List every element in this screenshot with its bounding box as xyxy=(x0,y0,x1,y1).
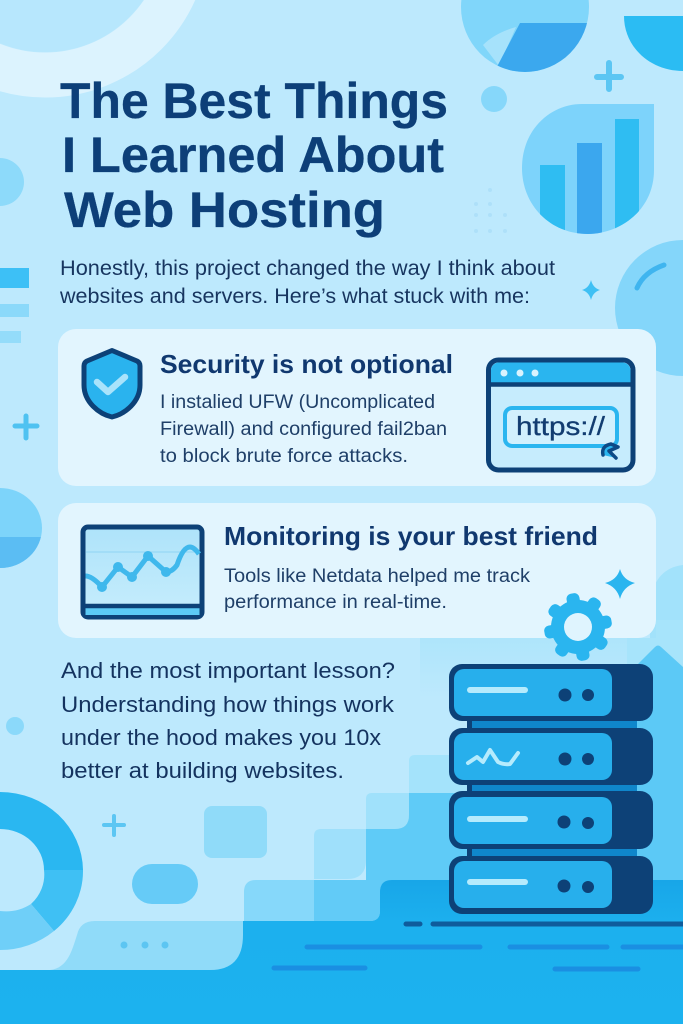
heading: monitoring: Monitoring is your best friend xyxy=(224,521,598,551)
server stack xyxy=(449,664,653,914)
donut chart xyxy=(0,792,83,950)
ground xyxy=(0,880,683,1024)
plus icon top xyxy=(597,63,621,89)
dot left xyxy=(6,717,24,735)
left stripes xyxy=(0,268,29,343)
intro text: websites and servers. Here’s what stuck with me: xyxy=(59,285,530,308)
heading: security: Security is not optional xyxy=(160,349,453,379)
closing text: under the hood makes you 10x xyxy=(61,725,381,750)
left circle xyxy=(0,158,24,206)
dotted grid xyxy=(474,188,507,233)
background steps xyxy=(244,620,683,921)
icon: shield xyxy=(84,350,140,417)
server unit 3 xyxy=(449,791,653,849)
icon: monitor chart xyxy=(83,527,202,617)
title: Web Hosting xyxy=(64,182,385,238)
quarter circle top right xyxy=(624,16,683,71)
plus icon lower xyxy=(104,816,124,835)
pie shape top right xyxy=(461,0,589,72)
left half circle xyxy=(0,488,42,569)
rounded square xyxy=(204,806,267,858)
blob right of cards xyxy=(650,565,683,645)
title: The Best Things xyxy=(60,73,448,129)
body: security: Firewall) and configured fail2ban xyxy=(160,419,447,440)
server unit 2 xyxy=(449,728,653,785)
closing text: better at building websites. xyxy=(61,758,344,783)
title: I Learned About xyxy=(62,127,444,183)
sparkle near gear xyxy=(605,569,635,599)
plus icon left xyxy=(15,416,37,438)
ground lines xyxy=(274,924,683,969)
panel: monitoring xyxy=(58,503,656,638)
sparkle xyxy=(582,280,600,300)
pill xyxy=(132,864,198,904)
title xyxy=(60,73,448,238)
panel: security xyxy=(58,329,656,486)
intro text: Honestly, this project changed the way I think about xyxy=(60,257,555,280)
body: monitoring: Tools like Netdata helped me track xyxy=(224,566,531,587)
decorative arc top left xyxy=(0,0,187,75)
circle right xyxy=(615,240,683,376)
body: monitoring xyxy=(224,566,531,613)
closing text: And the most important lesson? xyxy=(61,658,395,683)
icon: browser https: https:// xyxy=(516,411,606,441)
bar chart badge xyxy=(522,104,654,235)
body: security: I instalied UFW (Uncomplicated xyxy=(160,392,435,413)
closing text xyxy=(61,658,395,783)
server unit 1 xyxy=(449,664,653,721)
body: security xyxy=(160,392,447,467)
intro text xyxy=(59,257,555,308)
icon: browser https xyxy=(488,360,633,470)
closing text: Understanding how things work xyxy=(61,692,395,717)
server unit 4 xyxy=(449,856,653,914)
gear icon xyxy=(539,588,617,666)
footer dots xyxy=(120,942,168,948)
body: security: to block brute force attacks. xyxy=(160,446,408,467)
body: monitoring: performance in real-time. xyxy=(224,592,447,613)
dot xyxy=(481,86,507,112)
left hill xyxy=(50,921,244,970)
